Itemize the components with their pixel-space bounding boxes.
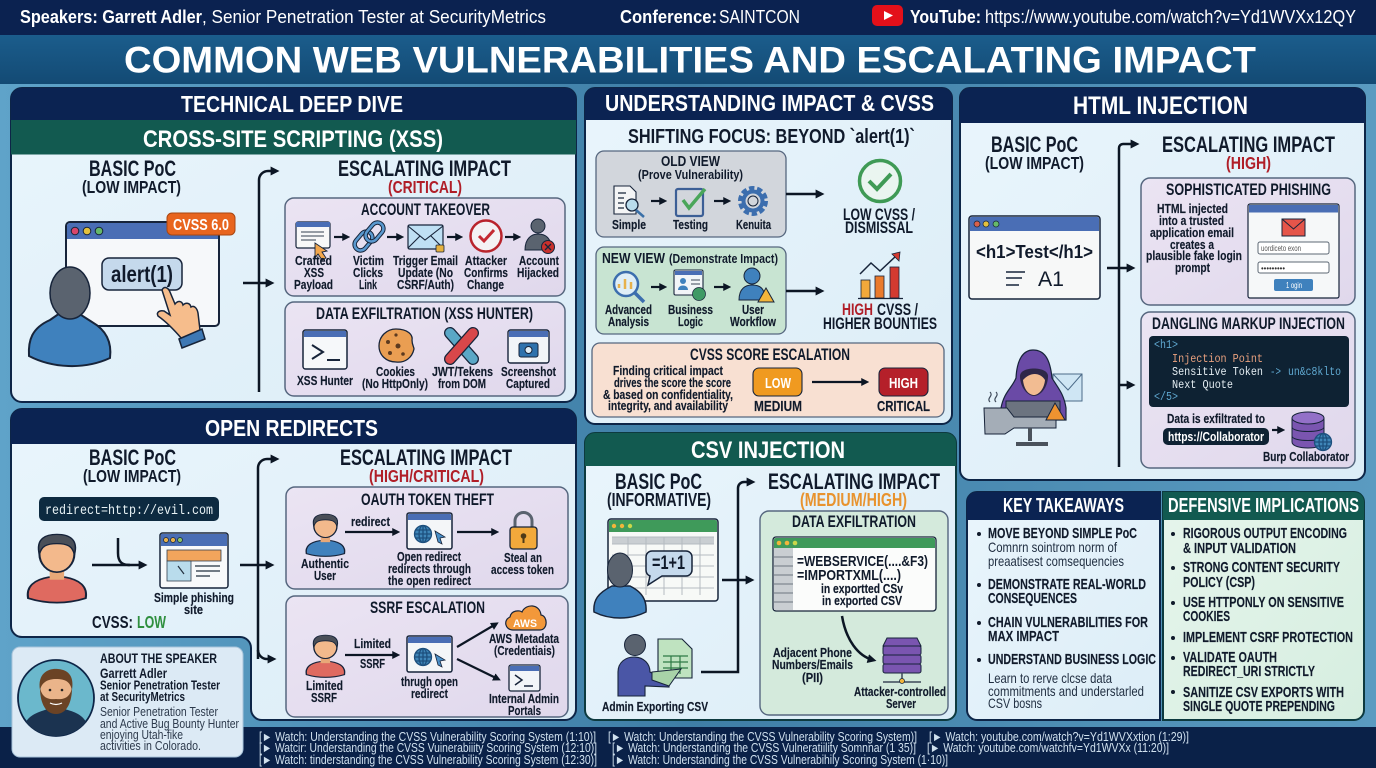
bullets: takeaways	[977, 525, 1156, 711]
text: escalation note	[603, 363, 733, 413]
illustration: h1 test browser	[969, 216, 1100, 299]
label: simple phishing site: Simple phishing	[154, 590, 234, 605]
icon: speech bubble formula	[646, 551, 692, 585]
sub-panel: old view: (Prove Vulnerability)	[638, 167, 743, 182]
label: adjacent PII: Adjacent Phone	[773, 645, 852, 660]
bullets: takeaways: CHAIN VULNERABILITIES FOR	[988, 614, 1148, 631]
icon: testing checkbox	[676, 189, 705, 216]
escalating impact heading	[338, 156, 511, 197]
alert(1) button: alert(1)	[111, 261, 173, 287]
code block: <h1>	[1154, 339, 1178, 352]
bullets: takeaways: Learn to rerve clcse data	[988, 670, 1112, 686]
bullets: takeaways: preaatisest comsequencies	[988, 553, 1124, 569]
result: low CVSS: DISMISSAL	[845, 219, 913, 237]
bullets: takeaways: DEMONSTRATE REAL-WORLD	[988, 576, 1146, 593]
labels: through open redirect: redirect	[411, 686, 449, 701]
arrows: PoC to escalation	[1107, 144, 1136, 467]
alert(1) button	[102, 258, 182, 290]
icon: hijacked user	[525, 219, 554, 254]
basic PoC heading: (INFORMATIVE)	[607, 490, 711, 510]
sub-panel: sophisticated phishing	[1141, 178, 1355, 305]
labels: new view: Business	[668, 302, 713, 317]
illustration: h1 test browser: <h1>Test</h1>	[976, 242, 1093, 262]
icon: speech bubble formula: =1+1	[652, 553, 685, 574]
label: attacker server: Attacker-controlled	[854, 684, 946, 699]
labels: new view: Advanced	[605, 302, 652, 317]
bullets: takeaways: Comnrn sointrom norm of	[988, 539, 1117, 555]
speaker credit: , Senior Penetration Tester at SecurityMetrics	[202, 7, 546, 27]
panel: key takeaways	[967, 492, 1160, 720]
basic PoC heading: (LOW IMPACT)	[83, 466, 181, 486]
icon: attacker server	[883, 638, 921, 684]
escalating impact heading: ESCALATING IMPACT	[340, 445, 512, 470]
labels: new view: Analysis	[608, 314, 649, 329]
footer video links: [► Watcir: Understanding the CVSS Vuinerabiiity Scoring System (12:10)]	[259, 741, 597, 755]
subheading: shifting focus: SHIFTING FOCUS: BEYOND `alert(1)`	[628, 126, 915, 148]
label: adjacent PII: (PII)	[802, 670, 823, 685]
top information bar	[0, 0, 1376, 35]
speaker portrait	[18, 660, 94, 736]
code block: Injection Point	[1172, 353, 1263, 366]
label: data exfiltrated: Data is exfiltrated to	[1167, 411, 1265, 426]
panel: technical deep dive / XSS	[11, 88, 576, 402]
main title: COMMON WEB VULNERABILITIES AND ESCALATING IMPACT	[124, 38, 1256, 80]
illustration: fake login window	[1248, 204, 1339, 298]
result: low CVSS: LOW CVSS /	[843, 206, 915, 224]
escalating impact heading: (HIGH)	[1226, 153, 1271, 173]
icon: admin exporting CSV	[618, 634, 692, 696]
labels: account takeover steps: XSS	[304, 265, 324, 280]
speaker bio: and Active Bug Bounty Hunter	[100, 717, 239, 731]
speaker bio: Senior Penetration Tester	[100, 705, 218, 719]
labels: limited SSRF	[306, 678, 343, 705]
badge: low: LOW	[765, 375, 792, 392]
labels: open redirect: the open redirect	[388, 573, 472, 588]
bullets: defenses: POLICY (CSP)	[1183, 574, 1255, 591]
escalating impact heading: (MEDIUM/HIGH)	[800, 490, 907, 510]
badge: high: HIGH	[889, 375, 918, 392]
labels: old view	[612, 217, 772, 232]
heading: open redirects: OPEN REDIRECTS	[205, 415, 378, 441]
labels: internal admin: Portals	[508, 703, 541, 718]
heading: cross-site scripting: CROSS-SITE SCRIPTING (XSS)	[143, 126, 443, 153]
labels: exfiltration targets: JWT/Tekens	[432, 364, 493, 379]
bullets: defenses: VALIDATE OAUTH	[1183, 649, 1277, 666]
code: redirect payload: redirect=http://evil.com	[45, 504, 213, 519]
sub-panel: data exfiltration: DATA EXFILTRATION	[792, 512, 916, 531]
footer video links: [► Watch: Understanding the CVSS Vulnerability Scoring System (1:10)]	[259, 730, 596, 744]
label: burp collaborator: Burp Collaborator	[1263, 449, 1349, 464]
code block: ->	[1270, 366, 1281, 379]
basic PoC heading	[607, 469, 711, 510]
illustration: hooded attacker	[984, 350, 1082, 444]
labels: AWS metadata: AWS Metadata	[489, 631, 560, 646]
sub-panel: dangling markup injection	[1141, 312, 1355, 468]
labels: account takeover steps: Account	[519, 253, 560, 268]
labels: exfiltration targets	[297, 364, 557, 391]
basic PoC heading: BASIC PoC	[615, 469, 702, 494]
sub-panel: CVSS score escalation	[592, 343, 944, 417]
bullets: takeaways: CSV bosns	[988, 695, 1042, 711]
arrows: new view flow	[651, 286, 728, 288]
formula window: in exported CSV	[822, 593, 902, 608]
heading: understanding impact: UNDERSTANDING IMPACT & CVSS	[605, 90, 934, 116]
labels: on arrow	[354, 636, 391, 671]
conference	[620, 7, 800, 27]
sub-panel: data exfiltration XSS hunter: DATA EXFILTRATION (XSS HUNTER)	[316, 305, 533, 323]
label: admin exporting CSV: Admin Exporting CSV	[602, 699, 708, 714]
text: phishing note: HTML injected	[1157, 201, 1228, 216]
illustration: h1 test browser: A1	[1038, 268, 1064, 291]
labels: exfiltration targets: Captured	[506, 376, 550, 391]
panel: understanding impact and CVSS	[585, 88, 952, 424]
illustration: fake login window: uordiceto exon	[1261, 244, 1301, 253]
bullets: takeaways: CONSEQUENCES	[988, 590, 1077, 607]
basic PoC heading: (LOW IMPACT)	[985, 153, 1084, 173]
icon: silhouette user	[29, 267, 110, 366]
sub-panel: data exfiltration XSS hunter	[285, 302, 565, 396]
icon: burp collaborator database	[1292, 412, 1332, 450]
speaker name and role: Senior Penetration Tester	[100, 678, 220, 692]
labels: account takeover steps	[294, 253, 560, 292]
basic PoC heading: (LOW IMPACT)	[82, 177, 181, 197]
labels: exfiltration targets: from DOM	[438, 376, 486, 391]
formula window: =WEBSERVICE(....&F3)	[797, 553, 928, 570]
speaker bio: activities in Colorado.	[100, 739, 201, 753]
labels: limited SSRF: Limited	[306, 678, 343, 693]
footer video links: [► Watch: youtube.com/watchfv=Yd1WVXx (11:20)]	[927, 741, 1169, 755]
footer video links: [► Watch: tinderstanding the CVSS Vulnerability Scoring System (12:30)]	[259, 753, 597, 767]
icon: screenshot window	[508, 330, 549, 363]
sub-panel: OAuth token theft	[286, 487, 568, 589]
basic PoC heading	[83, 445, 181, 486]
result: high CVSS: HIGHER BOUNTIES	[823, 315, 937, 333]
basic PoC heading: BASIC PoC	[991, 132, 1078, 157]
icon: crafted payload browser	[296, 222, 330, 260]
icon: silhouette user blue	[594, 553, 646, 618]
labels: account takeover steps: CSRF/Auth)	[397, 277, 454, 292]
labels: new view: Logic	[678, 314, 703, 329]
labels: exfiltration targets: Screenshot	[501, 364, 557, 379]
speaker name and role: at SecurityMetrics	[100, 690, 185, 704]
formula window: =IMPORTXML(....)	[797, 567, 901, 584]
formula window	[773, 537, 936, 611]
icon: padlock	[510, 512, 537, 549]
labels: new view: Workflow	[730, 314, 777, 329]
labels: account takeover steps: Update (No	[398, 265, 453, 280]
labels: steal token: Steal an	[504, 550, 542, 565]
labels: exfiltration targets: XSS Hunter	[297, 373, 353, 388]
footer video links: [► Watch: Understanding the CVSS Vulnerability Scoring System)]	[608, 730, 917, 744]
code block: Next Quote	[1172, 379, 1233, 392]
sub-panel: SSRF escalation: SSRF ESCALATION	[370, 599, 485, 617]
label: simple phishing site: site	[184, 602, 203, 617]
labels: old view: Simple	[612, 217, 646, 232]
arrow: formula to server	[842, 616, 873, 660]
text: phishing note: plausible fake login	[1146, 248, 1242, 263]
heading: key takeaways: KEY TAKEAWAYS	[1003, 495, 1124, 517]
bullets: takeaways: commitments and understarled	[988, 683, 1144, 699]
escalating impact heading	[768, 469, 940, 510]
arrows: SSRF flow	[345, 624, 498, 679]
escalating impact heading	[340, 445, 512, 486]
icon: check circle	[470, 220, 502, 252]
label: CVSS low: CVSS:	[92, 612, 133, 632]
sub-panel: old view: OLD VIEW	[661, 153, 721, 170]
label: CVSS low: LOW	[137, 612, 166, 632]
labels: internal admin	[489, 691, 559, 718]
sub-panel: new view	[596, 247, 786, 334]
YouTube link: YouTube:	[910, 7, 981, 27]
speaker credit: Speakers: Garrett Adler	[20, 7, 202, 27]
label: attacker server: Server	[886, 696, 916, 711]
label: redirect: redirect	[351, 514, 391, 529]
escalating impact heading	[1162, 132, 1335, 173]
labels: steal token	[491, 550, 554, 577]
escalating impact heading: ESCALATING IMPACT	[768, 469, 940, 494]
text: phishing note: prompt	[1175, 260, 1211, 275]
labels: account takeover steps: Victim	[353, 253, 384, 268]
bullets: takeaways: MOVE BEYOND SIMPLE PoC	[988, 525, 1137, 542]
icon: phishing browser	[160, 533, 228, 588]
label: adjacent PII: Numbers/Emails	[772, 657, 853, 672]
footer video links: [► Watch: youtube.com/watch?v=Yd1WVXxtion (1:29)]	[929, 730, 1189, 744]
text: phishing note: creates a	[1170, 237, 1215, 252]
footer video links: [► Watch: Understanding the CVSS Vulneratiility Somnnar (1 35)]	[612, 741, 916, 755]
footer video links: [► Watch: Understanding the CVSS Vulnerabihily Scoring System (1·10)]	[612, 753, 948, 767]
labels: account takeover steps: Clicks	[353, 265, 383, 280]
code block	[1149, 336, 1349, 407]
icon: business logic browser	[674, 270, 706, 300]
bullets: defenses: COOKIES	[1183, 608, 1230, 625]
labels: open redirect: Open redirect	[397, 549, 462, 564]
label: adjacent PII	[772, 645, 853, 685]
text: escalation note: & based on confidentiality,	[603, 387, 733, 402]
arrows: redirect flow	[345, 531, 496, 533]
icon: envelope	[408, 225, 444, 252]
speaker credit	[20, 7, 546, 27]
labels: AWS metadata: (Credentiais)	[494, 643, 555, 658]
basic PoC heading	[985, 132, 1084, 173]
escalating impact heading: (CRITICAL)	[388, 177, 462, 197]
icon: gear	[741, 189, 765, 213]
icon: user red	[28, 534, 86, 603]
formula window: in exportted CSv	[821, 581, 904, 596]
arrow: low to high	[812, 381, 866, 383]
labels: account takeover steps: Crafted	[295, 253, 332, 268]
labels: internal admin: Internal Admin	[489, 691, 559, 706]
result: high CVSS: HIGH	[842, 301, 873, 319]
labels: exfiltration targets: Cookies	[376, 364, 415, 379]
labels: limited SSRF: SSRF	[311, 690, 337, 705]
labels: AWS metadata	[489, 631, 560, 658]
panel: about the speaker	[12, 647, 243, 757]
code block: un&c8klto	[1288, 366, 1341, 379]
icon: JWT tokens	[450, 333, 473, 359]
badge: low	[753, 368, 802, 396]
sub-panel: account takeover: ACCOUNT TAKEOVER	[361, 201, 490, 219]
sub-panel: OAuth token theft: OAUTH TOKEN THEFT	[361, 491, 494, 509]
sub-panel: new view: (Demonstrate Impact)	[669, 251, 778, 266]
arrow: to collaborator	[1272, 429, 1282, 431]
label: simple phishing site	[154, 590, 234, 617]
illustration: alert browser window	[66, 222, 219, 348]
labels: authentic user: User	[314, 568, 336, 583]
sub-panel: CVSS score escalation: CVSS SCORE ESCALATION	[690, 346, 850, 364]
text: escalation note: Finding critical impact	[613, 363, 724, 378]
text: escalation note: integrity, and availability	[608, 398, 729, 413]
escalating impact heading: (HIGH/CRITICAL)	[369, 466, 484, 486]
icon: terminal	[303, 330, 347, 369]
icon: green check	[860, 160, 900, 202]
footer video links	[0, 727, 1376, 768]
labels: account takeover steps: Hijacked	[517, 265, 559, 280]
pill: collaborator URL: https://Collaborator	[1168, 429, 1264, 444]
icon: AWS cloud: AWS	[513, 618, 537, 630]
arrow: new view to result	[786, 290, 821, 292]
labels: authentic user: Authentic	[301, 556, 349, 571]
bullets: defenses: & INPUT VALIDATION	[1183, 540, 1296, 557]
heading: technical deep dive: TECHNICAL DEEP DIVE	[181, 91, 403, 117]
code: redirect payload	[39, 497, 219, 521]
arrows: PoC to data exfiltration	[701, 482, 752, 672]
sub-panel: new view: NEW VIEW	[602, 250, 666, 267]
result: high CVSS	[823, 301, 937, 333]
icon: admin terminal	[509, 665, 540, 691]
icon: clicking hand	[157, 288, 205, 348]
illustration: spreadsheet window	[608, 519, 718, 601]
sub-panel: SSRF escalation	[286, 596, 568, 718]
badge: high	[879, 368, 928, 396]
panel: defensive implications	[1163, 492, 1364, 720]
bullets: defenses	[1171, 525, 1353, 715]
icon: AWS cloud	[506, 606, 546, 630]
speaker bio	[100, 705, 239, 753]
icon: YouTube	[872, 5, 903, 26]
labels: open redirect: redirects through	[388, 561, 471, 576]
label: attacker server	[854, 684, 946, 711]
arrows: account takeover flow	[334, 236, 518, 238]
chart icon: rising bars	[858, 252, 903, 298]
labels: account takeover steps: Link	[359, 277, 378, 292]
conference: Conference:	[620, 7, 717, 27]
icon: SSRF browser	[407, 636, 452, 672]
labels: on arrow: Limited	[354, 636, 391, 651]
sub-panel: data exfiltration	[760, 511, 948, 715]
code block: </5>	[1154, 391, 1178, 404]
label: medium: MEDIUM	[754, 398, 802, 415]
basic PoC heading: BASIC PoC	[89, 156, 176, 181]
labels: account takeover steps: Change	[467, 277, 504, 292]
labels: account takeover steps: Confirms	[464, 265, 508, 280]
labels: old view: Testing	[673, 217, 708, 232]
basic PoC heading	[82, 156, 181, 197]
label: critical: CRITICAL	[877, 398, 930, 415]
result: high CVSS: CVSS /	[877, 301, 918, 319]
icon: user warning	[739, 268, 774, 302]
labels: new view	[605, 302, 777, 329]
labels: steal token: access token	[491, 562, 554, 577]
text: phishing note: application email	[1150, 225, 1234, 240]
heading: HTML injection: HTML INJECTION	[1073, 92, 1248, 120]
icon: redirect browser	[407, 513, 452, 549]
panel: HTML injection	[960, 88, 1365, 480]
labels: account takeover steps: Payload	[294, 277, 333, 292]
labels: on arrow: SSRF	[360, 656, 385, 671]
bullets: takeaways: UNDERSTAND BUSINESS LOGIC	[988, 651, 1156, 668]
arrow: PoC to escalation	[243, 171, 276, 392]
arrows: user to phishing site	[92, 459, 276, 659]
text: escalation note: drives the score the score	[614, 375, 731, 390]
result: low CVSS	[843, 206, 915, 237]
text: phishing note	[1146, 201, 1242, 275]
arrows: old view flow	[651, 200, 728, 202]
labels: authentic user	[301, 556, 349, 583]
labels: account takeover steps: Attacker	[465, 253, 507, 268]
code block: Sensitive Token	[1172, 366, 1263, 379]
icon: cookie	[379, 329, 414, 362]
icon: authentic user	[306, 514, 345, 556]
sub-panel: account takeover	[285, 198, 565, 296]
speaker bio: enjoying Utah-fike	[100, 728, 183, 742]
labels: open redirect	[388, 549, 472, 588]
CVSS 6.0 badge	[167, 213, 235, 235]
bullets: takeaways: MAX IMPACT	[988, 628, 1059, 645]
CVSS 6.0 badge: CVSS 6.0	[173, 217, 229, 234]
text: phishing note: into a trusted	[1159, 213, 1224, 228]
labels: new view: User	[742, 302, 764, 317]
speaker name and role: Garrett Adler	[100, 666, 168, 681]
icon: chain link	[352, 220, 386, 253]
icon: analysis magnifier	[614, 272, 644, 302]
labels: account takeover steps: Trigger Email	[393, 253, 458, 268]
panel: open redirects	[11, 409, 576, 720]
arrow: old view to result	[786, 193, 821, 195]
labels: old view: Kenuita	[736, 217, 772, 232]
panel: CSV injection	[585, 433, 956, 720]
labels: through open redirect	[401, 674, 458, 701]
illustration: fake login window: 1 ogin	[1286, 281, 1302, 290]
escalating impact heading: ESCALATING IMPACT	[338, 156, 511, 181]
labels: exfiltration targets: (No HttpOnly)	[362, 376, 428, 391]
speaker name and role	[100, 666, 220, 704]
conference: SAINTCON	[719, 7, 800, 27]
bullets: defenses: REDIRECT_URI STRICTLY	[1183, 663, 1315, 680]
basic PoC heading: BASIC PoC	[89, 445, 176, 470]
title band	[0, 35, 1376, 84]
sub-panel: old view	[596, 151, 786, 237]
icon: limited SSRF user	[306, 635, 345, 677]
illustration: fake login window: •••••••••	[1261, 264, 1285, 273]
speaker heading: ABOUT THE SPEAKER	[100, 650, 217, 666]
labels: through open redirect: thrugh open	[401, 674, 458, 689]
icon: document search	[614, 186, 644, 217]
heading: CSV injection: CSV INJECTION	[691, 437, 845, 464]
